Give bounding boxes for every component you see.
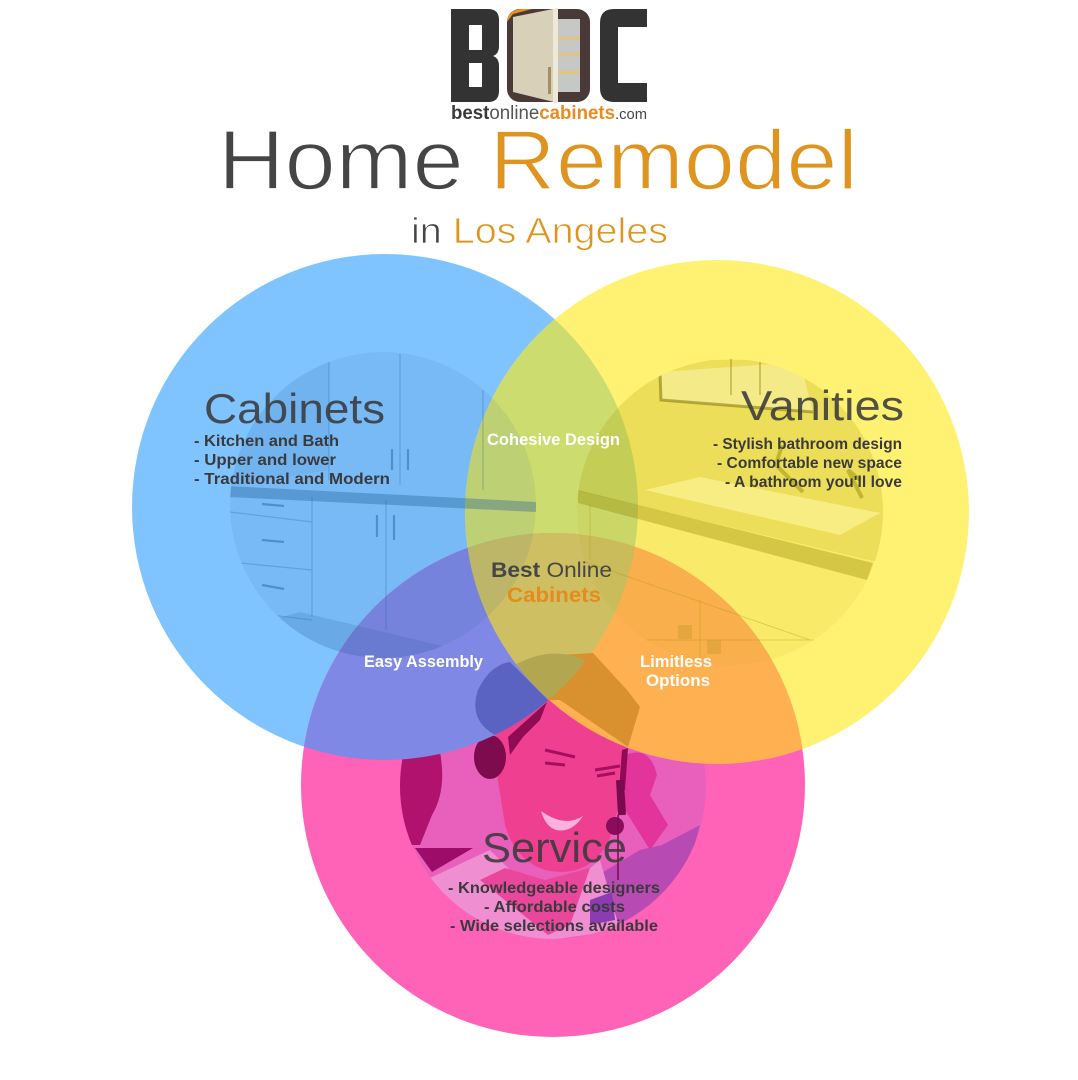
photo: kitchen cabinets bbox=[228, 352, 537, 680]
label: best online cabinets: Best Online bbox=[491, 559, 612, 582]
list: vanities: - Comfortable new space bbox=[717, 455, 902, 472]
list: service bbox=[448, 880, 660, 935]
label: best online cabinets bbox=[491, 559, 612, 607]
overlap: cabinets and vanities bbox=[465, 319, 638, 548]
overlap: vanities and service bbox=[520, 533, 802, 764]
circle: vanities bbox=[465, 260, 969, 764]
list: vanities: - A bathroom you'll love bbox=[725, 474, 902, 491]
panel: cabinets bbox=[194, 385, 390, 488]
logo wordmark: bestonlinecabinets.com bbox=[451, 103, 647, 124]
heading: vanities: Vanities bbox=[741, 382, 904, 429]
panel: service bbox=[448, 824, 660, 935]
heading: service: Service bbox=[482, 824, 627, 871]
list: cabinets: - Kitchen and Bath bbox=[194, 433, 339, 450]
label: limitless options: Options bbox=[646, 671, 710, 690]
circle: service bbox=[301, 533, 805, 1037]
list: vanities: - Stylish bathroom design bbox=[713, 436, 902, 453]
panel: vanities bbox=[713, 382, 904, 491]
photo: bathroom vanity bbox=[575, 358, 890, 665]
list: service: - Affordable costs bbox=[484, 899, 625, 916]
venn diagram bbox=[132, 254, 969, 1037]
heading: cabinets: Cabinets bbox=[204, 385, 385, 432]
list: service: - Knowledgeable designers bbox=[448, 880, 660, 897]
logo bbox=[451, 8, 647, 124]
subtitle: in Los Angeles bbox=[411, 210, 668, 251]
overlap: cabinets and service bbox=[304, 533, 580, 760]
logo letter B bbox=[451, 9, 499, 102]
photo: hair and headband seen through the overlaps bbox=[475, 653, 640, 747]
list: cabinets bbox=[194, 433, 390, 488]
title: Home Remodel bbox=[218, 113, 858, 207]
label: cohesive design: Cohesive Design bbox=[487, 430, 620, 449]
overlap: all three bbox=[468, 533, 635, 700]
label: limitless options bbox=[640, 652, 712, 690]
list: cabinets: - Upper and lower bbox=[194, 452, 336, 469]
list: vanities bbox=[713, 436, 902, 491]
list: service: - Wide selections available bbox=[450, 918, 658, 935]
logo letter C bbox=[600, 9, 647, 102]
label: easy assembly: Easy Assembly bbox=[364, 652, 484, 671]
list: cabinets: - Traditional and Modern bbox=[194, 471, 390, 488]
label: limitless options: Limitless bbox=[640, 652, 712, 671]
circle: cabinets bbox=[132, 254, 638, 760]
photo: smiling service agent with headset bbox=[400, 700, 706, 939]
label: best online cabinets: Cabinets bbox=[507, 584, 601, 607]
logo cabinet O bbox=[507, 8, 590, 103]
